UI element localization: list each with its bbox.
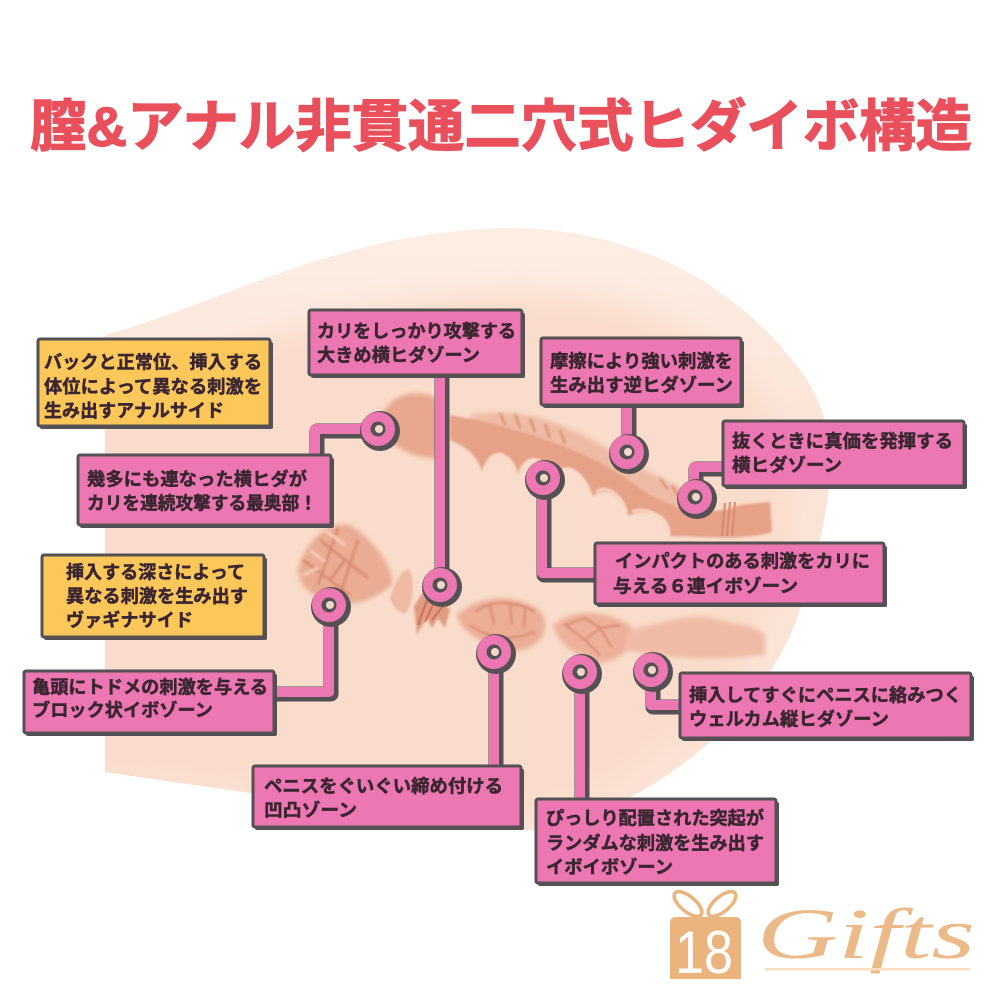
icon: gift box with bow: 18 (675, 919, 733, 986)
callout: vagina side: ヴァギナサイド (66, 610, 193, 630)
connector: large ribs (422, 372, 462, 607)
callout: uneven zone (253, 766, 524, 830)
product body silhouette (60, 228, 830, 830)
icon: gift box with bow (670, 887, 741, 986)
lower channel (298, 524, 765, 663)
callout: anal side (38, 339, 273, 429)
callout: welcome zone (680, 673, 974, 741)
deepest section blob (383, 393, 445, 458)
callout: reverse ribs: 生み出す逆ヒダゾーン (550, 374, 733, 396)
upper channel (383, 393, 772, 537)
callout: uneven zone: ペニスをぐいぐい締め付ける (264, 776, 503, 796)
connector: block zone (272, 587, 351, 694)
connector: reverse ribs (609, 402, 649, 474)
callout: block zone (24, 671, 277, 736)
callout: withdrawal ribs: 横ヒダゾーン (732, 454, 842, 476)
callout: anal side: 体位によって異なる刺激を (44, 377, 262, 397)
callout: six bumps: インパクトのある刺激をカリに (615, 552, 870, 572)
scalloped ridge with six bumps (450, 415, 772, 537)
callout: withdrawal ribs: 抜くときに真価を発揮する (732, 432, 953, 452)
connector: deepest section (315, 411, 400, 458)
callout: large ribs: 大きめ横ヒダゾーン (317, 344, 480, 366)
bump zone (457, 598, 545, 651)
connector: uneven zone (476, 634, 516, 770)
title: 膣&アナル非貫通二穴式ヒダイボ構造 (30, 95, 972, 158)
connector lines and markers (272, 372, 726, 802)
callout: welcome zone: ウェルカム縦ヒダゾーン (689, 708, 889, 730)
dense bump zone (553, 613, 633, 663)
callout: withdrawal ribs (723, 421, 967, 489)
callout: large ribs: カリをしっかり攻撃する (317, 320, 516, 342)
callout: dense bump zone: イボイボゾーン (546, 858, 673, 878)
callout: reverse ribs: 摩擦により強い刺激を (550, 352, 733, 372)
block zone (298, 524, 392, 604)
connector: withdrawal ribs (677, 467, 726, 519)
callout: anal side: バックと正常位、挿入する (44, 352, 262, 372)
connector: six bumps (525, 460, 598, 575)
callout: large ribs (309, 310, 525, 378)
callout: vagina side: 異なる刺激を生み出す (66, 586, 248, 606)
callout: deepest section: カリを連続攻撃する最奥部！ (87, 492, 317, 514)
callout: block zone: 亀頭にトドメの刺激を与える (32, 678, 268, 698)
callout: six bumps (595, 543, 887, 607)
callout: dense bump zone (536, 799, 779, 886)
connector: dense bump zone (562, 654, 602, 802)
callout: vagina side (42, 555, 267, 640)
callout: dense bump zone: ランダムな刺激を生み出す (546, 832, 764, 854)
reverse ridge upper fringe (470, 412, 695, 510)
connector: welcome zone (633, 652, 684, 707)
callout: vagina side: 挿入する深さによって (66, 562, 245, 582)
callout: deepest section (78, 455, 334, 528)
callout: six bumps: 与える６連イボゾーン (613, 576, 798, 596)
callout: block zone: ブロック状イボゾーン (32, 700, 213, 720)
callout: dense bump zone: ぴっしり配置された突起が (546, 808, 764, 828)
logo: 18 Gifts (670, 887, 975, 986)
callout: reverse ribs (541, 338, 744, 408)
callout: anal side: 生み出すアナルサイド (44, 401, 224, 421)
callout: deepest section: 幾多にも連なった横ヒダが (87, 468, 307, 490)
callout: uneven zone: 凹凸ゾーン (264, 800, 357, 820)
wordmark: Gifts (757, 894, 975, 974)
callout: welcome zone: 挿入してすぐにペニスに絡みつく (689, 686, 962, 706)
ribbed zone (390, 569, 413, 614)
entrance taper (625, 617, 765, 658)
